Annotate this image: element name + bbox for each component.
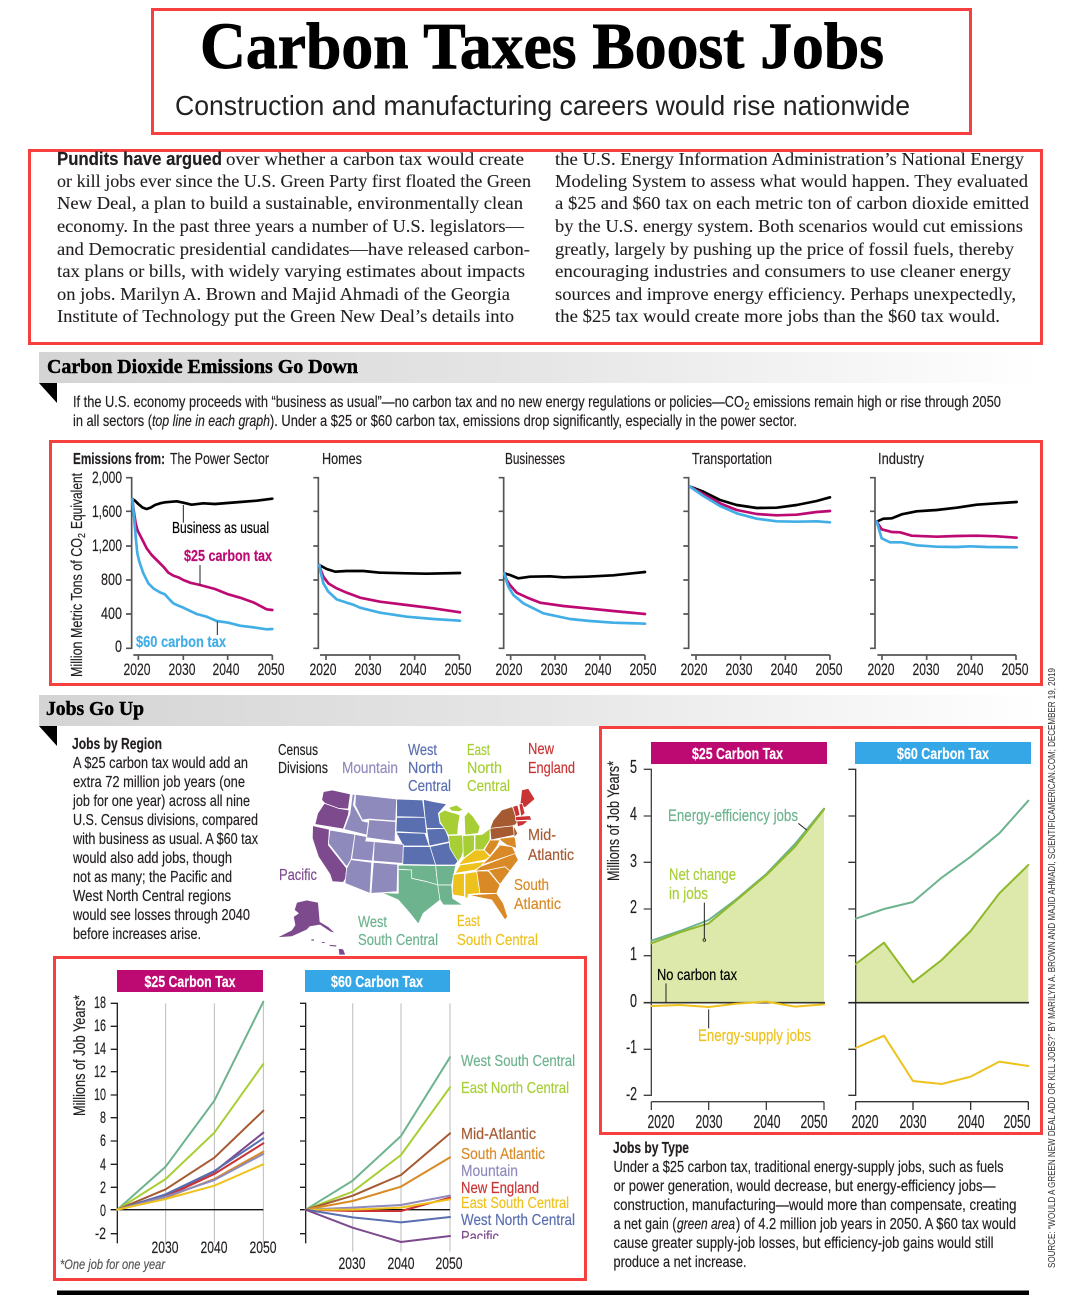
- y axis tick labels: 1: [630, 944, 637, 964]
- region line labels: New England: [461, 1180, 539, 1197]
- y axis title: Millions of Job Years*: [70, 995, 89, 1116]
- chart heading labels: Emissions from:: [73, 451, 165, 468]
- x axis year labels: 2020: [680, 660, 708, 679]
- map labels: West: [358, 914, 387, 931]
- y axis tick labels: 12: [94, 1062, 106, 1081]
- x axis year labels: 2020: [496, 660, 522, 679]
- x axis labels: 2050: [800, 1112, 828, 1132]
- region line labels: East South Central: [461, 1195, 569, 1212]
- label: net change in jobs: Net change: [669, 865, 736, 884]
- x axis year labels: 2040: [956, 660, 984, 679]
- subtitle: Construction and manufacturing careers would rise nationwide: [175, 90, 910, 121]
- y axis tick labels: 0: [100, 1201, 106, 1220]
- heading: Carbon Dioxide Emissions Go Down: Carbon Dioxide Emissions Go Down: [47, 356, 358, 378]
- panel: introductory text: [30, 149, 1042, 344]
- map labels: East: [467, 742, 490, 759]
- text block: emissions intro: ). Under a $25 or $60 carbon tax, emissions drop significantly, especially in the power sector.: [270, 413, 797, 430]
- x axis year labels: 2020: [124, 660, 150, 679]
- chart: businesses: [499, 478, 645, 660]
- header: $25 carbon tax: [651, 742, 827, 764]
- map labels: [278, 741, 575, 949]
- map labels: England: [528, 760, 575, 777]
- text block: left column: New Deal, a plan to build a sustainable, environmentally clean: [57, 193, 523, 213]
- y axis tick labels: 16: [94, 1016, 106, 1035]
- header: $25 carbon tax: $25 Carbon Tax: [144, 974, 236, 991]
- y axis title: Millions of Job Years*: [604, 761, 623, 881]
- y axis tick labels: 3: [630, 851, 637, 871]
- text block: jobs by region: U.S. Census divisions, compared: [73, 812, 258, 829]
- header: $60 carbon tax: $60 Carbon Tax: [897, 746, 989, 763]
- text block: right column: the $25 tax would create more jobs than the $60 tax would.: [555, 306, 1000, 326]
- label: energy-efficiency jobs: Energy-efficiency jobs: [668, 806, 798, 825]
- text block: jobs by type: green area: [677, 1216, 735, 1233]
- y axis tick labels: -2: [95, 1224, 106, 1243]
- line chart: $60 tax by region: [300, 1003, 450, 1252]
- region line labels: [461, 1053, 575, 1246]
- y axis title: Equivalent: [69, 473, 86, 529]
- footnote: *One job for one year: [60, 1256, 166, 1272]
- chart: transportation: [683, 478, 830, 660]
- region line labels: South Atlantic: [461, 1146, 545, 1163]
- map labels: North: [467, 760, 502, 777]
- x axis labels: $25: 2030: [152, 1238, 178, 1257]
- x axis year labels: 2020: [868, 660, 894, 679]
- text block: right column: encouraging industries and consumers to use cleaner energy: [555, 261, 1011, 281]
- text block: emissions intro: in all sectors (: [73, 413, 153, 430]
- text block: jobs by region: not as many; the Pacific and: [73, 869, 232, 886]
- region line labels: West North Central: [461, 1212, 575, 1229]
- map labels: Mid-: [528, 827, 556, 844]
- x axis labels: 2050: [1004, 1112, 1030, 1132]
- text block: emissions intro: [73, 394, 1001, 430]
- y axis tick labels: 0: [115, 637, 122, 656]
- label: no carbon tax: No carbon tax: [657, 967, 737, 984]
- x axis year labels: 2040: [770, 660, 798, 679]
- chart heading labels: Industry: [878, 451, 924, 468]
- text block: left column: on jobs. Marilyn A. Brown and Majid Ahmadi of the Georgia: [57, 284, 510, 304]
- x axis labels: $60: 2040: [388, 1254, 414, 1273]
- y axis tick labels: 6: [100, 1131, 106, 1150]
- y axis tick labels: 1,600: [92, 502, 122, 521]
- map labels: Atlantic: [514, 896, 561, 913]
- text block: right column: [555, 149, 1029, 326]
- label: $60 carbon tax: $60 carbon tax: [136, 634, 226, 651]
- text block: jobs by type: produce a net increase.: [614, 1254, 746, 1271]
- text block: emissions intro: If the U.S. economy proceeds with “business as usual”—no carbon tax and no new energy regulations or policies—CO: [73, 394, 744, 411]
- panel: jobs by type charts: [600, 728, 1042, 1134]
- x axis year labels: 2030: [912, 660, 940, 679]
- x axis labels: 2020: [852, 1112, 878, 1132]
- text block: right column: Modeling System to assess what would happen. They evaluated: [555, 171, 1028, 191]
- region line labels: Pacific: [461, 1229, 499, 1246]
- x axis year labels: 2030: [354, 660, 382, 679]
- y axis tick labels: 0: [630, 991, 637, 1011]
- text block: jobs by region: [72, 736, 258, 943]
- text block: left column: Institute of Technology put the Green New Deal’s details into: [57, 306, 514, 326]
- x axis labels: [648, 1112, 1030, 1132]
- text block: left column: and Democratic presidential candidates—have released carbon-: [57, 239, 530, 259]
- panel: title block: [152, 10, 970, 134]
- y axis tick labels: [94, 993, 106, 1243]
- region line labels: East North Central: [461, 1080, 569, 1097]
- x axis labels: $25: 2040: [200, 1238, 228, 1257]
- header: $60 carbon tax: [305, 970, 450, 992]
- map labels: Census: [278, 742, 318, 759]
- map labels: Divisions: [278, 760, 328, 777]
- map labels: South Central: [358, 932, 438, 949]
- y axis tick labels: [626, 757, 637, 1104]
- y axis tick labels: 2: [100, 1178, 106, 1197]
- text block: jobs by region: job for one year) across all nine: [72, 793, 250, 810]
- source credit: SOURCE: “WOULD A GREEN NEW DEAL ADD OR KILL JOBS?” BY MARILYN A. BROWN AND MAJID AHMADI, SCIENTIFICAMERICAN.COM; DECEMBER 19, 2019: [1046, 668, 1058, 1268]
- heading: Carbon Dioxide Emissions Go Down: [39, 352, 1039, 403]
- x axis year labels: 2050: [258, 660, 284, 679]
- map labels: East: [457, 913, 480, 930]
- x axis year labels: 2050: [1002, 660, 1028, 679]
- text block: right column: a $25 and $60 tax on each metric ton of carbon dioxide emitted: [555, 193, 1029, 213]
- panel: jobs by region charts: [54, 958, 586, 1280]
- x axis year labels: 2040: [584, 660, 612, 679]
- x axis labels: $60: [338, 1254, 462, 1273]
- label: net change in jobs: in jobs: [669, 884, 708, 903]
- text block: right column: greatly, largely by pushing up the price of fossil fuels, thereby: [555, 239, 1014, 259]
- y axis tick labels: 10: [94, 1085, 106, 1104]
- y axis tick labels: 4: [100, 1155, 106, 1174]
- chart heading labels: The Power Sector: [170, 451, 270, 468]
- x axis labels: 2020: [648, 1112, 674, 1132]
- text block: jobs by region: A $25 carbon tax would add an: [73, 755, 248, 772]
- x axis year labels: 2050: [630, 660, 656, 679]
- region line labels: Mountain: [461, 1163, 518, 1180]
- x axis year labels: 2030: [168, 660, 196, 679]
- text block: left column: tax plans or bills, with widely varying estimates about impacts: [57, 261, 525, 281]
- text block: right column: the U.S. Energy Information Administration’s National Energy: [555, 149, 1024, 169]
- text block: jobs by region: Jobs by Region: [72, 736, 162, 753]
- y axis title: 2: [77, 533, 88, 538]
- label: business as usual: Business as usual: [172, 520, 269, 537]
- x axis year labels: 2050: [816, 660, 842, 679]
- heading: Jobs Go Up: [39, 695, 1039, 746]
- header: $25 carbon tax: $25 Carbon Tax: [692, 746, 783, 763]
- text block: right column: by the U.S. energy system. Both scenarios would cut emissions: [555, 216, 1023, 236]
- y axis tick labels: 18: [94, 993, 106, 1012]
- map: census divisions: [277, 741, 575, 955]
- y axis tick labels: 4: [630, 804, 637, 824]
- label: net change in jobs: [669, 865, 736, 903]
- x axis labels: 2030: [900, 1112, 926, 1132]
- line chart: $25 tax by region: [111, 1002, 263, 1243]
- text block: left column: over whether a carbon tax would create: [226, 149, 524, 169]
- chart heading labels: [73, 451, 924, 468]
- y axis tick labels: 14: [94, 1039, 106, 1058]
- heading: Jobs Go Up: Jobs Go Up: [46, 698, 144, 720]
- y axis tick labels: 1,200: [92, 536, 122, 555]
- x axis labels: $25: [152, 1238, 276, 1257]
- x axis labels: $60: 2050: [436, 1254, 462, 1273]
- header: $60 carbon tax: $60 Carbon Tax: [331, 974, 423, 991]
- text block: jobs by region: West North Central regions: [73, 888, 231, 905]
- label: $25 carbon tax: $25 carbon tax: [184, 548, 272, 565]
- y axis tick labels: 5: [630, 757, 637, 777]
- map labels: West: [408, 742, 437, 759]
- title: Carbon Taxes Boost Jobs: [200, 10, 884, 83]
- x axis year labels: 2030: [540, 660, 568, 679]
- map labels: Atlantic: [528, 847, 574, 864]
- x axis labels: 2030: [696, 1112, 722, 1132]
- chart heading labels: Homes: [322, 451, 362, 468]
- chart heading labels: Transportation: [692, 451, 772, 468]
- area chart: $60 tax by type: [848, 769, 1029, 1110]
- x axis year labels: 2040: [212, 660, 240, 679]
- chart: industry: [870, 478, 1017, 660]
- text block: jobs by region: would see losses through 2040: [72, 907, 250, 924]
- text block: jobs by region: would also add jobs, though: [72, 850, 232, 867]
- map labels: Central: [467, 778, 510, 795]
- region line labels: West South Central: [461, 1053, 575, 1070]
- text block: jobs by region: extra 72 million job years (one: [73, 774, 245, 791]
- text block: emissions intro: 2: [744, 400, 750, 412]
- x axis labels: $60: 2030: [338, 1254, 366, 1273]
- y axis tick labels: 800: [101, 570, 122, 589]
- text block: left column: economy. In the past three years a number of U.S. legislators—: [57, 216, 525, 236]
- map labels: Mountain: [342, 760, 398, 777]
- text block: jobs by type: [613, 1140, 1016, 1271]
- text block: emissions intro: top line in each graph: [152, 413, 270, 430]
- x axis year labels: [124, 660, 1028, 679]
- y axis tick labels: -1: [626, 1037, 637, 1057]
- y axis tick labels: -2: [626, 1084, 637, 1104]
- chart: homes: [313, 478, 460, 660]
- text block: jobs by type: a net gain (: [614, 1216, 677, 1233]
- y axis title: Million Metric Tons of CO: [69, 538, 86, 677]
- y axis tick labels: 2: [630, 897, 637, 917]
- area chart: $25 tax by type: [644, 769, 825, 1110]
- y axis tick labels: [92, 468, 122, 656]
- text block: jobs by type: Jobs by Type: [613, 1140, 689, 1157]
- region line labels: Mid-Atlantic: [461, 1126, 536, 1143]
- map labels: South Central: [457, 932, 538, 949]
- text block: jobs by region: before increases arise.: [73, 926, 201, 943]
- y axis tick labels: 8: [100, 1108, 106, 1127]
- text block: left column: [57, 149, 531, 326]
- text block: emissions intro: emissions remain high or rise through 2050: [753, 394, 1001, 411]
- y axis tick labels: 400: [101, 604, 122, 623]
- map labels: South: [514, 877, 549, 894]
- map labels: Pacific: [279, 867, 317, 884]
- label: energy-supply jobs: Energy-supply jobs: [698, 1026, 811, 1045]
- x axis labels: 2040: [958, 1112, 984, 1132]
- map labels: New: [528, 741, 554, 758]
- x axis year labels: 2020: [310, 660, 336, 679]
- panel: emissions charts: [50, 442, 1042, 684]
- chart: power sector: [126, 478, 272, 660]
- chart heading labels: Businesses: [505, 451, 565, 468]
- map shapes: [277, 788, 535, 955]
- x axis year labels: 2030: [726, 660, 752, 679]
- x axis year labels: 2040: [400, 660, 426, 679]
- text block: right column: sources and improve energy efficiency. Perhaps unexpectedly,: [555, 284, 1016, 304]
- x axis year labels: 2050: [444, 660, 472, 679]
- map labels: Central: [408, 778, 451, 795]
- text block: jobs by region: with business as usual. A $60 tax: [72, 831, 258, 848]
- map labels: North: [408, 760, 443, 777]
- header: $60 carbon tax: [855, 742, 1031, 764]
- x axis labels: 2040: [754, 1112, 780, 1132]
- text block: left column: Pundits have argued: [57, 149, 222, 169]
- text block: left column: or kill jobs ever since the U.S. Green Party first floated the Green: [57, 171, 531, 191]
- header: $25 carbon tax: [117, 970, 263, 992]
- y axis tick labels: 2,000: [92, 468, 122, 487]
- x axis labels: $25: 2050: [250, 1238, 276, 1257]
